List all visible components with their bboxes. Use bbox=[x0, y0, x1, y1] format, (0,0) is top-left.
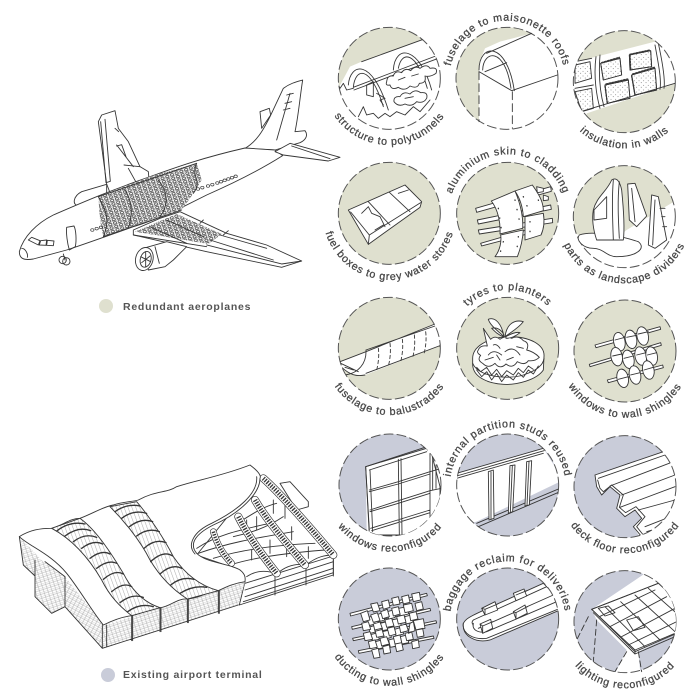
structure frame lines bbox=[98, 163, 197, 237]
panel: fuselage to balustrades: fuselage to balustrades bbox=[334, 382, 443, 416]
roof edge band bbox=[191, 477, 257, 554]
far wing bbox=[98, 111, 149, 193]
fuselage bbox=[19, 148, 283, 260]
arch truss 1 bbox=[213, 532, 232, 563]
engine bbox=[133, 242, 187, 273]
cockpit and door bbox=[22, 226, 76, 257]
panel: windows to wall shingles bbox=[569, 300, 681, 418]
near wing bbox=[133, 212, 302, 267]
panel: aluminium skin to cladding: aluminium skin to cladding bbox=[447, 146, 568, 194]
panel: deck floor reconfigured: deck floor reconfigured bbox=[572, 522, 679, 554]
legend: redundant aeroplanes: Redundant aeroplanes bbox=[123, 301, 251, 313]
cabin windows bbox=[91, 175, 237, 231]
panel: windows to wall shingles: windows to wall shingles bbox=[569, 382, 681, 418]
panel: ducting to wall shingles: ducting to wall shingles bbox=[335, 654, 444, 686]
facade walls bbox=[19, 537, 245, 648]
exposed structure bbox=[197, 477, 333, 605]
panel: baggage reclaim for deliveries bbox=[442, 554, 570, 670]
illustration: redundant aeroplane bbox=[19, 80, 340, 273]
tailplane bbox=[275, 143, 340, 161]
skylight band 2 bbox=[110, 502, 218, 599]
end block bbox=[280, 482, 308, 510]
arch truss 4 bbox=[263, 478, 333, 555]
panel: deck floor reconfigured bbox=[572, 435, 679, 554]
tail fin bbox=[245, 80, 307, 150]
legend: existing airport terminal: Existing airport terminal bbox=[123, 669, 263, 681]
panel: windows reconfigured: windows reconfigured bbox=[338, 522, 442, 552]
roof bbox=[19, 465, 260, 625]
panel: structure to polytunnels bbox=[334, 26, 444, 148]
panel: fuel boxes to grey water stores: fuel boxes to grey water stores bbox=[326, 230, 452, 282]
panel: fuselage to maisonette roofs bbox=[444, 13, 569, 130]
panel: internal partition studs reused bbox=[442, 420, 572, 536]
panel: fuselage to maisonette roofs: fuselage to maisonette roofs bbox=[444, 13, 569, 66]
illustration: existing airport terminal bbox=[19, 465, 333, 648]
panel: insulation in walls: insulation in walls bbox=[580, 126, 668, 148]
panel: baggage reclaim for deliveries: baggage reclaim for deliveries bbox=[442, 554, 570, 612]
arch truss 2 bbox=[238, 517, 277, 573]
panel: fuselage to balustrades bbox=[334, 296, 443, 416]
panel: tyres to planters bbox=[456, 282, 560, 400]
panel: lighting reconfigured: lighting reconfigured bbox=[575, 660, 674, 688]
panel: fuel boxes to grey water stores bbox=[326, 162, 452, 282]
panel: parts as landscape dividers: parts as landscape dividers bbox=[562, 242, 684, 284]
panel: lighting reconfigured bbox=[574, 570, 676, 688]
nose gear bbox=[59, 254, 70, 265]
panel: aluminium skin to cladding bbox=[447, 146, 568, 265]
panel: structure to polytunnels: structure to polytunnels bbox=[334, 113, 444, 148]
arch truss 3 bbox=[255, 500, 305, 565]
panel: tyres to planters: tyres to planters bbox=[463, 282, 550, 306]
panel: parts as landscape dividers bbox=[562, 165, 684, 284]
panel: internal partition studs reused: internal partition studs reused bbox=[442, 420, 572, 476]
panel: insulation in walls bbox=[572, 30, 676, 148]
panel: ducting to wall shingles bbox=[335, 568, 444, 686]
far engine bbox=[74, 184, 107, 206]
skylight band 1 bbox=[52, 518, 160, 616]
exposed fuselage structure bbox=[98, 163, 202, 237]
panel: windows reconfigured bbox=[338, 434, 442, 552]
